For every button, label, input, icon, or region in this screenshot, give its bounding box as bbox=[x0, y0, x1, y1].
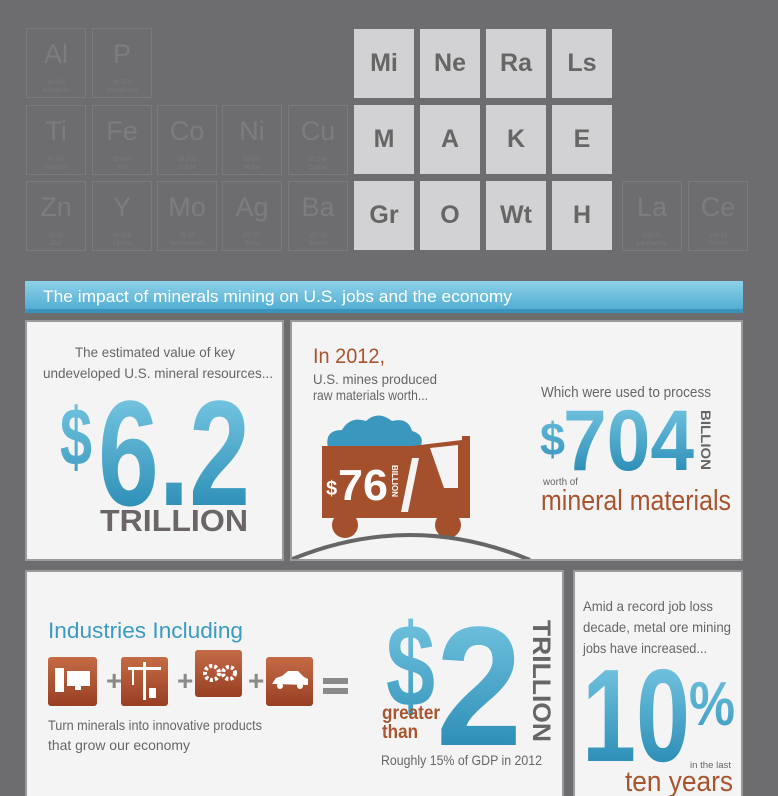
text: amid record job loss: decade, metal ore mining bbox=[583, 619, 731, 635]
faded periodic table tiles: Phosphorus bbox=[106, 88, 138, 94]
title tiles: Minerals make growth: M bbox=[374, 125, 394, 153]
text: estimated value: The estimated value of key bbox=[75, 344, 235, 360]
faded periodic table tiles: La bbox=[637, 192, 667, 222]
title tiles: Minerals make growth: Gr bbox=[369, 201, 399, 229]
faded periodic table tiles: Y bbox=[113, 192, 131, 222]
text: roughly 15%: Roughly 15% of GDP in 2012 bbox=[381, 752, 542, 768]
text: amid record job loss bbox=[582, 598, 731, 656]
faded periodic table tiles: Lanthanum bbox=[637, 241, 667, 247]
faded periodic table tiles: Al bbox=[44, 39, 68, 69]
text: estimated value: undeveloped U.S. mineral resources... bbox=[43, 365, 273, 381]
icon: dump truck with $76 billion: $ bbox=[326, 478, 337, 500]
faded periodic table tiles: 47.867 bbox=[47, 157, 65, 163]
text: turn minerals: Turn minerals into innovative products bbox=[48, 717, 262, 733]
text: which were used to process: Which were used to process bbox=[541, 384, 711, 401]
TRILLION vertical: TRILLION bbox=[527, 620, 555, 742]
text: In 2012: In 2012, bbox=[313, 345, 385, 368]
icon: crane bbox=[121, 657, 168, 706]
faded periodic table tiles: Copper bbox=[308, 165, 328, 171]
faded periodic table tiles: Titanium bbox=[45, 165, 67, 171]
faded periodic table tiles: Mo bbox=[168, 192, 206, 222]
icon: dump truck with $76 billion bbox=[290, 416, 530, 560]
panel: industries bbox=[25, 570, 564, 796]
panel: $6.2 trillion bbox=[25, 320, 284, 561]
icon: dump truck with $76 billion: BILLION bbox=[390, 465, 399, 497]
title tiles: Minerals make growth: Wt bbox=[500, 201, 532, 229]
big number: greater than $2 trillion: than bbox=[382, 722, 418, 743]
title tiles: Minerals make growth bbox=[354, 29, 612, 250]
faded periodic table tiles: Cobalt bbox=[178, 165, 196, 171]
faded periodic table tiles: Cu bbox=[301, 116, 335, 146]
text: amid record job loss: jobs have increased... bbox=[582, 640, 707, 656]
faded periodic table tiles: Cerium bbox=[708, 241, 728, 247]
text: worth of mineral materials: worth of bbox=[542, 477, 578, 488]
title tiles: Minerals make growth: Mi bbox=[370, 49, 398, 77]
faded periodic table tiles: P bbox=[113, 39, 131, 69]
faded periodic table tiles: Zinc bbox=[50, 241, 62, 247]
icon: gears bbox=[195, 650, 242, 697]
text: turn minerals bbox=[48, 717, 262, 753]
big number 6.2 bbox=[60, 369, 250, 537]
big number 6.2: $ bbox=[60, 392, 92, 483]
faded periodic table tiles: Ti bbox=[45, 116, 67, 146]
faded periodic table tiles bbox=[26, 28, 748, 251]
BILLION vertical: BILLION bbox=[698, 410, 714, 470]
big number 704 billion: $ bbox=[540, 413, 565, 465]
text: in the last ten years: in the last bbox=[690, 760, 732, 770]
text: amid record job loss: Amid a record job loss bbox=[583, 598, 713, 614]
big number: greater than $2 trillion bbox=[382, 592, 522, 782]
title tiles: Minerals make growth: E bbox=[574, 125, 590, 153]
icons row bbox=[48, 650, 348, 706]
text: In 2012: U.S. mines produced bbox=[313, 371, 437, 387]
big number: greater than $2 trillion: $ bbox=[386, 600, 435, 732]
faded periodic table tiles: 26.982 bbox=[47, 80, 65, 86]
title tiles: Minerals make growth: Ne bbox=[434, 49, 466, 77]
faded periodic table tiles: 137.33 bbox=[309, 233, 327, 239]
faded periodic table tiles: 55.845 bbox=[113, 157, 131, 163]
text: estimated value bbox=[43, 344, 273, 381]
banner heading: The impact of minerals mining on U.S. jobs and the economy bbox=[43, 287, 513, 306]
icon: computer bbox=[48, 657, 97, 706]
faded periodic table tiles: Co bbox=[170, 116, 204, 146]
faded periodic table tiles: Ag bbox=[235, 192, 269, 222]
faded periodic table tiles: Fe bbox=[106, 116, 138, 146]
icon: car bbox=[266, 657, 313, 706]
faded periodic table tiles: 58.933 bbox=[178, 157, 196, 163]
icons row: + bbox=[106, 665, 122, 696]
icons row: + bbox=[248, 665, 264, 696]
text: turn minerals: that grow our economy bbox=[48, 737, 190, 753]
big number: greater than $2 trillion: greater bbox=[382, 703, 441, 724]
faded periodic table tiles: Iron bbox=[117, 165, 127, 171]
faded periodic table tiles: Ni bbox=[239, 116, 265, 146]
faded periodic table tiles: Ce bbox=[701, 192, 735, 222]
text: In 2012: raw materials worth... bbox=[313, 387, 428, 403]
big number: greater than $2 trillion: 2 bbox=[436, 592, 522, 782]
faded periodic table tiles: 95.96 bbox=[179, 233, 194, 239]
equals sign bbox=[323, 678, 348, 694]
faded periodic table tiles: Zn bbox=[40, 192, 72, 222]
faded periodic table tiles: Molybdenum bbox=[170, 241, 204, 247]
faded periodic table tiles: Barium bbox=[308, 241, 328, 247]
big number 10%: % bbox=[689, 670, 735, 739]
title tiles: Minerals make growth: K bbox=[507, 125, 525, 153]
faded periodic table tiles: Yttrium bbox=[112, 241, 132, 247]
big number 10%: 10 bbox=[582, 642, 690, 789]
TRILLION label: TRILLION bbox=[100, 503, 248, 538]
heading: Industries Including: Industries Including bbox=[48, 618, 243, 643]
faded periodic table tiles: 107.87 bbox=[243, 233, 261, 239]
panel: 2012 production bbox=[290, 320, 743, 561]
banner heading bbox=[25, 281, 743, 313]
title tiles: Minerals make growth: O bbox=[440, 201, 460, 229]
icons row: + bbox=[177, 665, 193, 696]
title tiles: Minerals make growth: H bbox=[573, 201, 591, 229]
faded periodic table tiles: 58.693 bbox=[243, 157, 261, 163]
big number 704 billion: 704 bbox=[563, 393, 694, 489]
faded periodic table tiles: 63.546 bbox=[309, 157, 327, 163]
title tiles: Minerals make growth: Ls bbox=[567, 49, 597, 77]
faded periodic table tiles: 140.12 bbox=[709, 233, 727, 239]
faded periodic table tiles: 30.974 bbox=[113, 80, 131, 86]
title tiles: Minerals make growth: Ra bbox=[500, 49, 532, 77]
faded periodic table tiles: Aluminium bbox=[42, 88, 70, 94]
faded periodic table tiles: 65.38 bbox=[48, 233, 64, 239]
text: In 2012 bbox=[313, 345, 437, 403]
title tiles: Minerals make growth: A bbox=[441, 125, 459, 153]
icon: dump truck with $76 billion: 76 bbox=[338, 461, 388, 510]
faded periodic table tiles: Silver bbox=[244, 241, 260, 247]
faded periodic table tiles: Nickel bbox=[244, 165, 260, 171]
faded periodic table tiles: 138.91 bbox=[643, 233, 661, 239]
faded periodic table tiles: 88.906 bbox=[113, 233, 131, 239]
panel: 10% jobs bbox=[573, 570, 743, 796]
faded periodic table tiles: Ba bbox=[301, 192, 335, 222]
